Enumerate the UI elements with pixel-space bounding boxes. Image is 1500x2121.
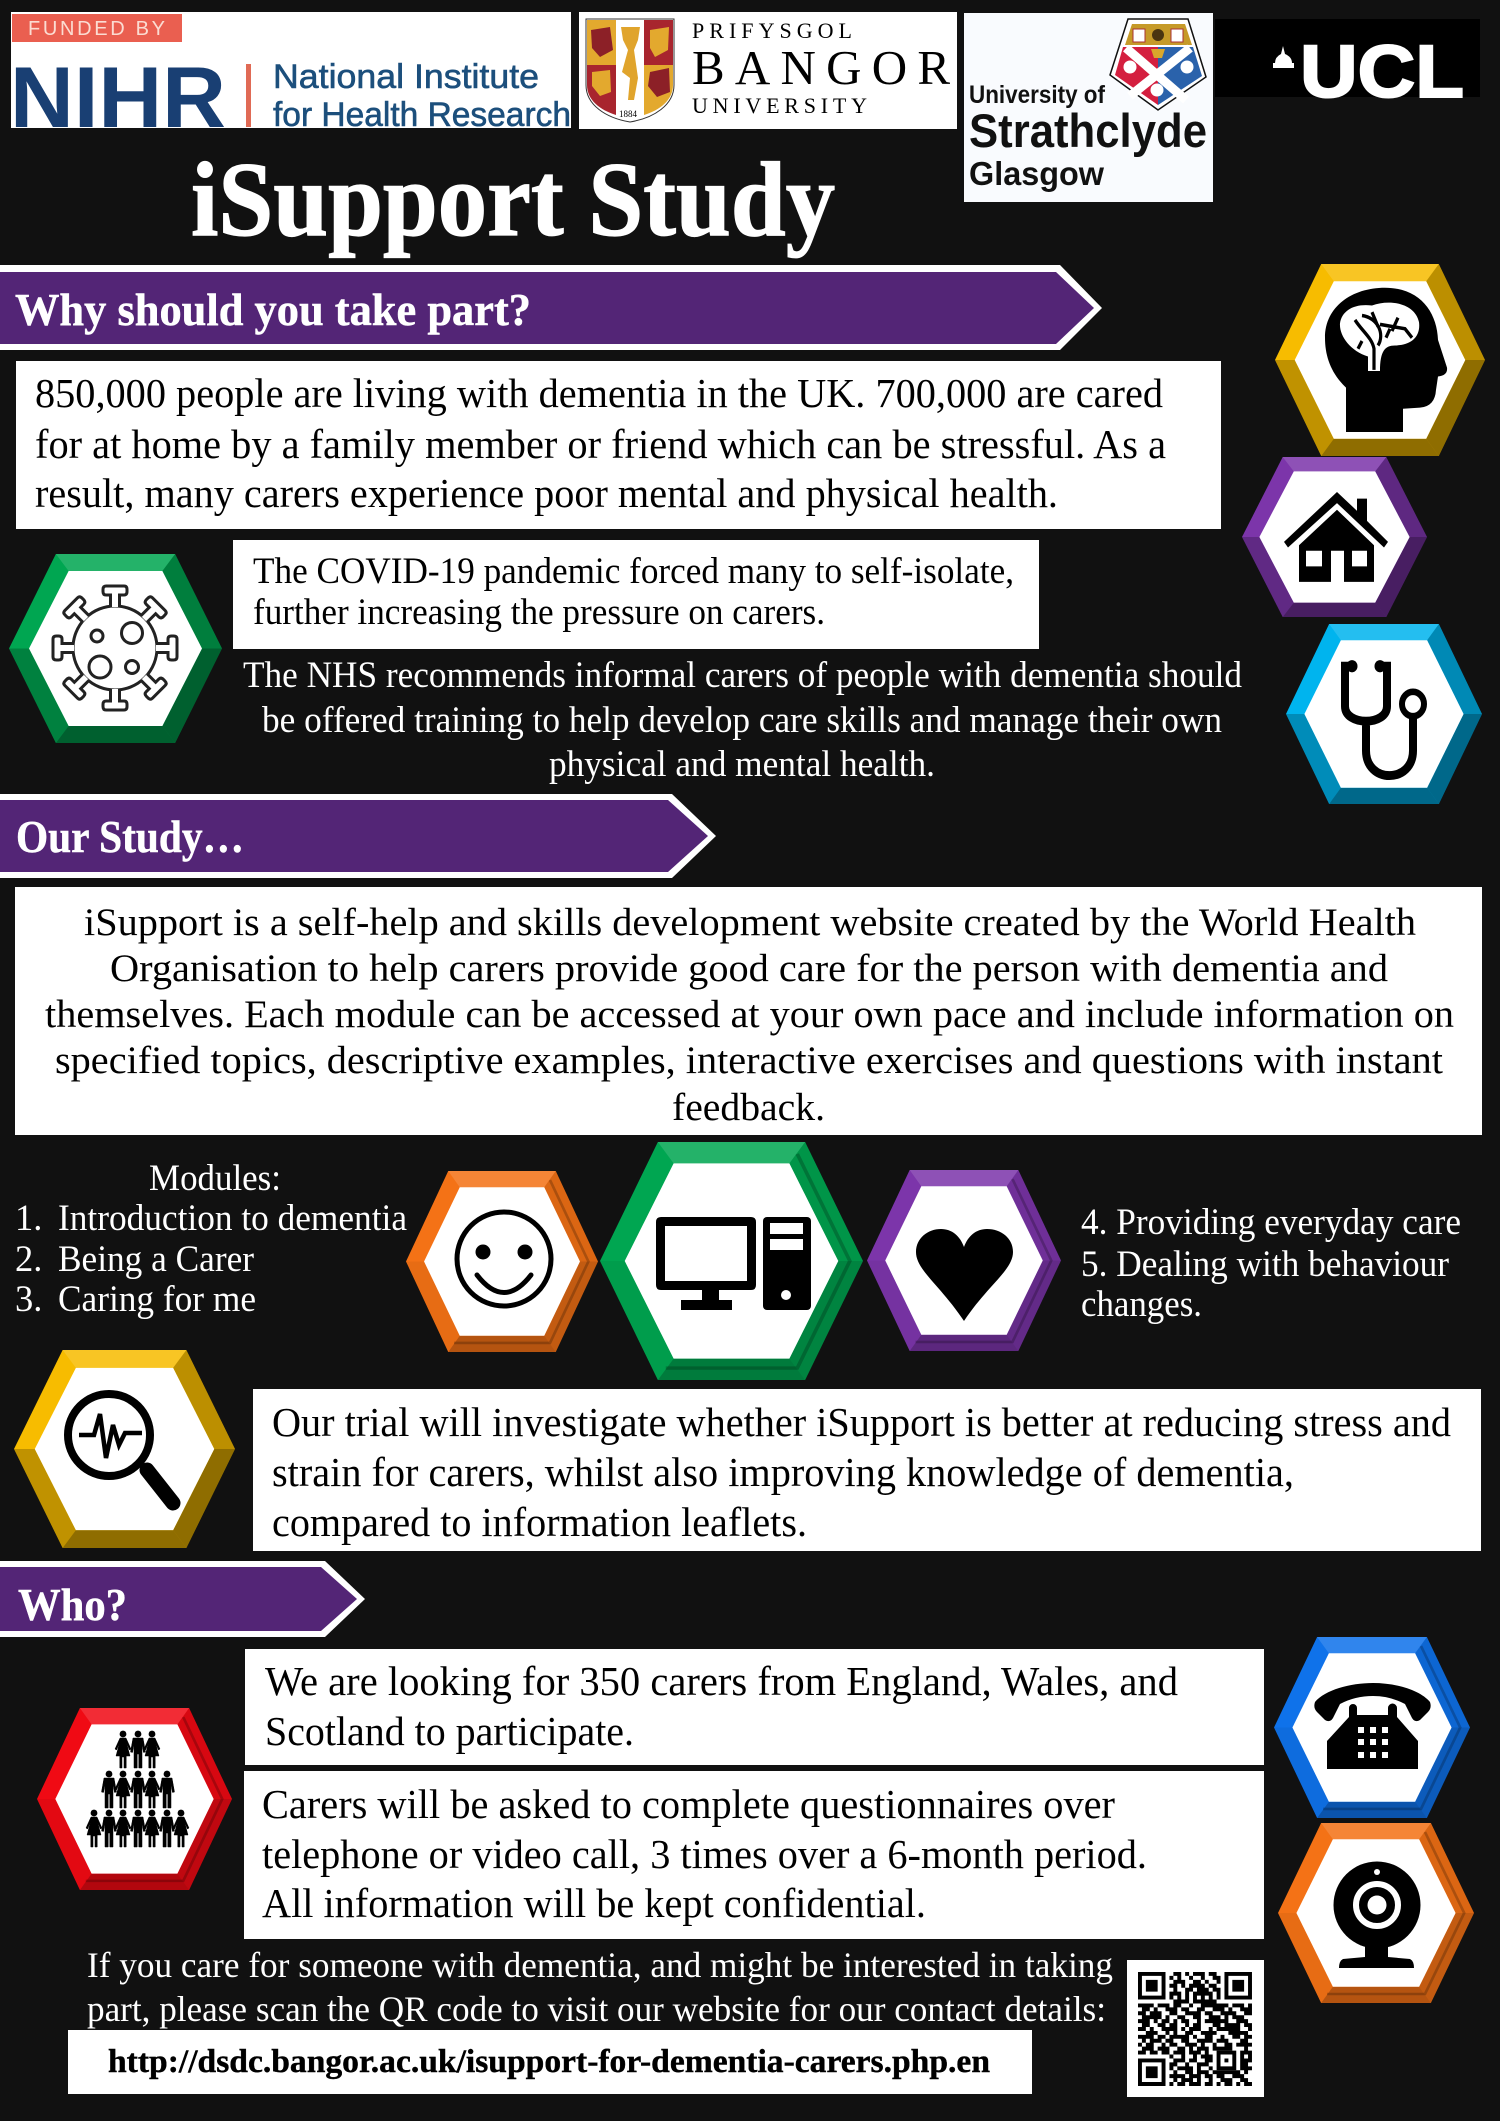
text box: questionnaires: telephone or video call, 3 times over a 6-month period. (262, 1831, 1147, 1877)
text box: trial aim: Our trial will investigate whether iSupport is better at reducing stress and (272, 1399, 1451, 1445)
text box: questionnaires: All information will be kept confidential. (262, 1880, 926, 1926)
text block: modules 1 to 3: 3. (15, 1278, 42, 1319)
text block: NHS recommendation: be offered training to help develop care skills and manage their own (262, 699, 1222, 740)
text block: call to action (87, 1945, 1113, 2029)
text block: modules 1 to 3 (15, 1157, 407, 1319)
text box: questionnaires (244, 1771, 1264, 1939)
text block: modules 1 to 3: Introduction to dementia (58, 1197, 407, 1238)
text block: modules 1 to 3: Modules: (149, 1157, 281, 1198)
text block: modules 1 to 3: 2. (15, 1238, 42, 1279)
icon: desktop computer (600, 1142, 863, 1380)
section banner: why should you take part: Why should you take part? (15, 284, 531, 335)
section banner: who: Who? (18, 1579, 127, 1630)
logo: University of Strathclyde: Glasgow (969, 155, 1104, 192)
icon: heart (867, 1170, 1061, 1351)
text block: modules 4 and 5: changes. (1081, 1283, 1202, 1324)
logo: NIHR: National Institute (273, 58, 539, 96)
icon: webcam (1278, 1823, 1474, 2003)
title: iSupport Study (191, 141, 835, 258)
text box: what iSupport is: themselves. Each module can be accessed at your own pace and include information on (45, 992, 1454, 1036)
text box: questionnaires: Carers will be asked to complete questionnaires over (262, 1781, 1115, 1827)
logo: University of Strathclyde (964, 13, 1213, 202)
logo: NIHR: for Health Research (273, 96, 571, 134)
text block: modules 1 to 3: Being a Carer (58, 1238, 254, 1279)
logo: NIHR (10, 12, 571, 146)
website address box (68, 2030, 1032, 2094)
text box: covid pressure: The COVID-19 pandemic forced many to self-isolate, (253, 550, 1014, 591)
text box: what iSupport is (15, 887, 1482, 1135)
text box: recruitment: We are looking for 350 carers from England, Wales, and (265, 1658, 1178, 1704)
text block: NHS recommendation: physical and mental health. (549, 743, 935, 784)
QR code (1127, 1960, 1264, 2097)
section banner: who (0, 1561, 365, 1637)
logo: Bangor University: 1884 (619, 109, 638, 119)
text box: dementia statistics: 850,000 people are living with dementia in the UK. 700,000 are cared (35, 370, 1163, 416)
text box: trial aim: strain for carers, whilst also improving knowledge of dementia, (272, 1449, 1294, 1495)
text box: covid pressure (233, 540, 1039, 649)
icon: magnifying glass with pulse (14, 1350, 235, 1548)
text block: NHS recommendation (243, 654, 1242, 784)
icon: brain in head (1275, 264, 1485, 456)
text box: covid pressure: further increasing the pressure on carers. (253, 591, 825, 632)
logo: Bangor University: PRIFYSGOL (692, 18, 852, 43)
text block: modules 4 and 5: 5. Dealing with behaviour (1081, 1243, 1449, 1284)
logo: UCL (1215, 19, 1480, 113)
text box: dementia statistics: for at home by a family member or friend which can be stressful. As a (35, 421, 1166, 467)
logo: Bangor University: BANGOR (692, 40, 950, 95)
logo: NIHR: NIHR (10, 50, 226, 146)
text block: call to action: If you care for someone with dementia, and might be interested in taking (87, 1945, 1113, 1985)
text box: what iSupport is: iSupport is a self-help and skills development website created by the World Health (84, 900, 1416, 944)
text box: recruitment (245, 1649, 1264, 1765)
icon: coronavirus (9, 554, 222, 743)
icon: telephone (1274, 1637, 1470, 1818)
text block: call to action: part, please scan the QR code to visit our website for our contact details: (87, 1989, 1106, 2029)
logo: University of Strathclyde: Strathclyde (969, 104, 1207, 157)
icon: group of people (37, 1708, 232, 1890)
text box: dementia statistics (16, 361, 1221, 529)
icon: house (1242, 457, 1427, 617)
section banner: why should you take part (0, 265, 1102, 350)
icon: smiley face (406, 1171, 598, 1352)
website address box: http://dsdc.bangor.ac.uk/isupport-for-dementia-carers.php.en (108, 2044, 990, 2080)
text box: what iSupport is: specified topics, descriptive examples, interactive exercises and questions with instant (55, 1038, 1443, 1082)
logo: University of Strathclyde: University of (969, 81, 1106, 109)
text block: modules 1 to 3: Caring for me (58, 1278, 256, 1319)
text block: NHS recommendation: The NHS recommends informal carers of people with dementia should (243, 654, 1242, 695)
logo: Bangor University (579, 12, 957, 129)
logo: UCL: UCL (1300, 30, 1464, 113)
icon: stethoscope (1286, 624, 1482, 804)
text box: trial aim: compared to information leaflets. (272, 1499, 807, 1545)
text box: what iSupport is: Organisation to help carers provide good care for the person with dementia and (110, 946, 1388, 990)
text block: modules 1 to 3: 1. (15, 1197, 42, 1238)
section banner: our study (0, 794, 716, 878)
text block: modules 4 and 5: 4. Providing everyday care (1081, 1201, 1461, 1242)
section banner: our study: Our Study… (16, 811, 244, 862)
logo: NIHR: FUNDED BY (28, 18, 165, 40)
text box: trial aim (253, 1389, 1481, 1551)
text block: modules 4 and 5 (1081, 1201, 1461, 1324)
text box: what iSupport is: feedback. (672, 1085, 825, 1129)
text box: recruitment: Scotland to participate. (265, 1708, 634, 1754)
text box: dementia statistics: result, many carers experience poor mental and physical health. (35, 470, 1058, 516)
logo: Bangor University: UNIVERSITY (692, 93, 867, 118)
